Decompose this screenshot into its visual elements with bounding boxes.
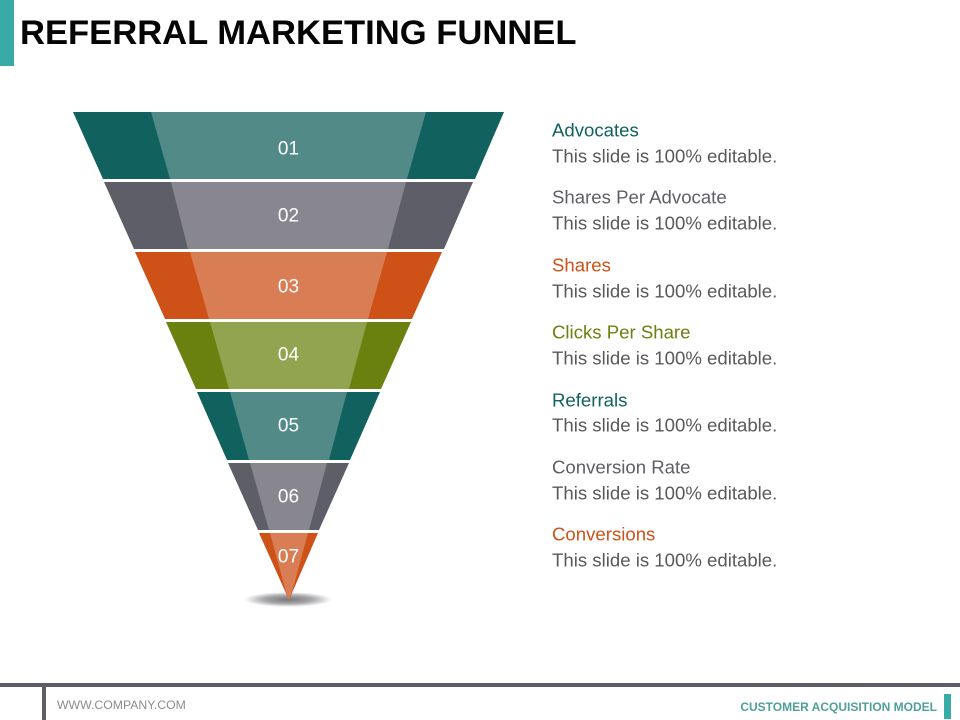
title: REFERRAL MARKETING FUNNEL: [20, 14, 576, 52]
label: Advocates: This slide is 100% editable.: [552, 146, 777, 166]
label: Conversion Rate: [552, 456, 777, 504]
funnel band 01: 01: [278, 138, 299, 160]
label: Advocates: Advocates: [552, 120, 639, 140]
label: Clicks Per Share: [552, 322, 777, 368]
label: Shares Per Advocate: [552, 186, 777, 234]
label: Conversion Rate: This slide is 100% editable.: [552, 482, 777, 504]
footer left tick: [42, 687, 46, 720]
label: Referrals: This slide is 100% editable.: [552, 414, 777, 436]
label: Shares Per Advocate: Shares Per Advocate: [552, 186, 727, 208]
label list: [552, 120, 777, 570]
funnel band 05: [197, 392, 380, 460]
footer model name: CUSTOMER ACQUISITION MODEL: [740, 700, 937, 714]
footer rule: [0, 683, 960, 687]
label: Conversion Rate: Conversion Rate: [552, 456, 690, 478]
funnel band 05: 05: [278, 416, 299, 436]
footer accent bar: [944, 694, 951, 719]
label: Referrals: [552, 390, 777, 436]
title accent bar: [0, 0, 14, 66]
funnel chart: [73, 112, 504, 607]
funnel band 02: 02: [278, 206, 299, 226]
funnel shadow: [244, 592, 332, 607]
label: Conversions: This slide is 100% editable.: [552, 550, 777, 570]
label: Clicks Per Share: This slide is 100% editable.: [552, 348, 777, 368]
label: Conversions: Conversions: [552, 524, 655, 544]
label: Shares Per Advocate: This slide is 100% editable.: [552, 212, 777, 234]
funnel band 04: 04: [278, 344, 299, 366]
label: Shares: [552, 254, 777, 302]
funnel band 06: [228, 463, 349, 530]
label: Conversions: [552, 524, 777, 570]
funnel band 01: [73, 112, 504, 179]
funnel band 03: [135, 252, 442, 319]
funnel band 03: 03: [278, 276, 299, 298]
funnel band 02: [104, 182, 473, 249]
footer website text: WWW.COMPANY.COM: [57, 698, 186, 712]
label: Shares: Shares: [552, 254, 611, 276]
label: Shares: This slide is 100% editable.: [552, 280, 777, 302]
funnel band 07: 07: [278, 546, 299, 568]
funnel band 06: 06: [278, 486, 299, 508]
funnel band 07: [259, 533, 318, 600]
label: Clicks Per Share: Clicks Per Share: [552, 322, 690, 342]
label: Referrals: Referrals: [552, 390, 627, 410]
label: Advocates: [552, 120, 777, 166]
funnel band 04: [166, 322, 411, 389]
